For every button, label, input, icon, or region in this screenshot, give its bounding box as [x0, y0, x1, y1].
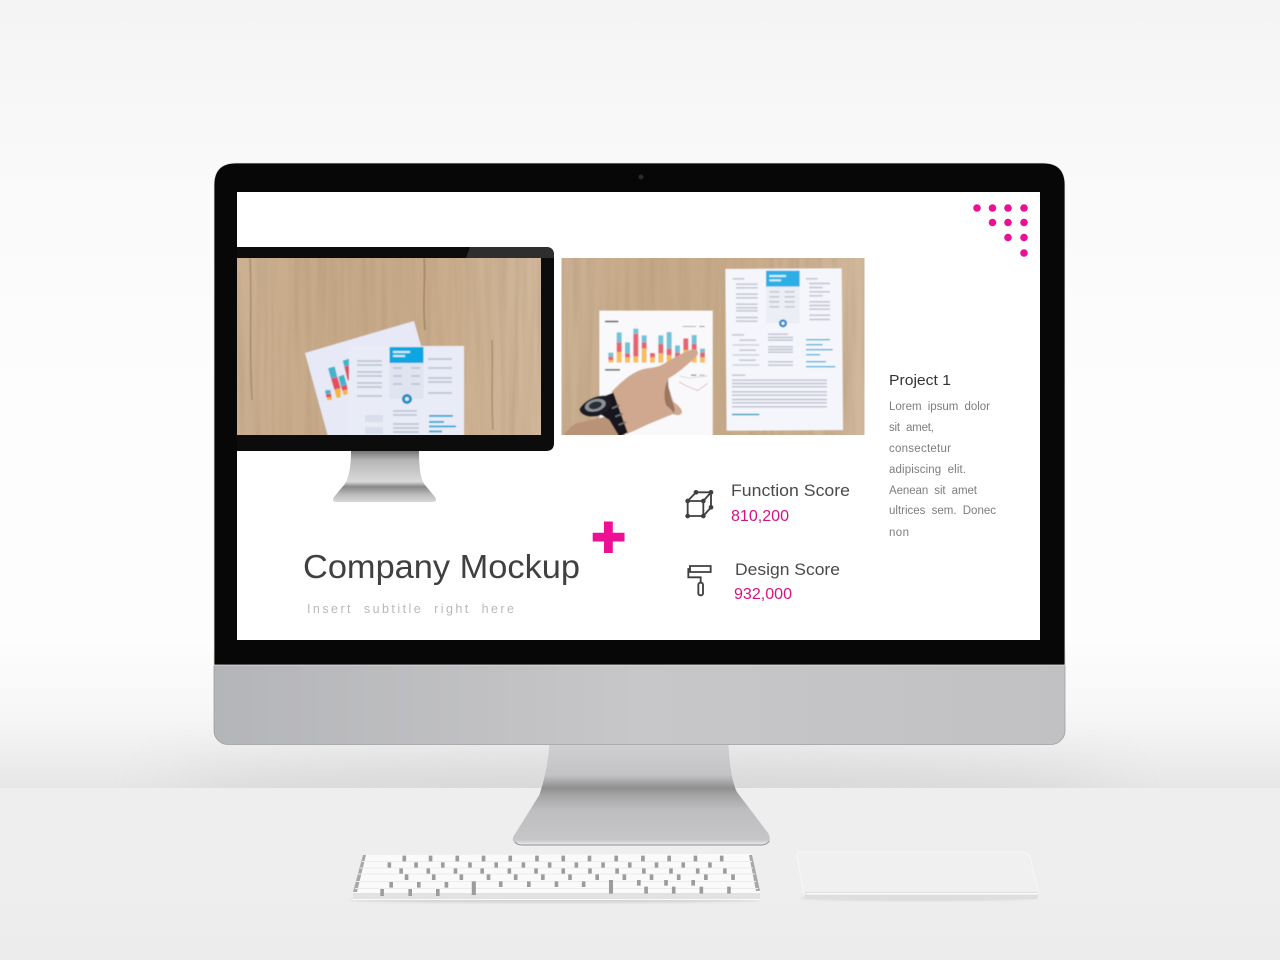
webcam [638, 174, 644, 180]
rotated chart paper [304, 320, 422, 435]
project description: ultrices sem. Donec [889, 505, 996, 517]
monitor stand [513, 745, 770, 845]
slide screen [237, 192, 1040, 640]
title: Company Mockup [303, 548, 580, 585]
trackpad [797, 852, 1038, 901]
keyboard body [353, 854, 760, 900]
project description: non [889, 527, 909, 539]
monitor body [214, 163, 1065, 744]
pink dot decoration [973, 204, 1028, 257]
project description: consectetur [889, 443, 951, 455]
small monitor picture: wood desk with reports [235, 256, 543, 440]
key row lines [355, 862, 758, 888]
project description: Aenean sit amet [889, 485, 978, 497]
line chart [679, 382, 708, 391]
subtitle: Insert subtitle right here [307, 602, 516, 616]
keyboard [350, 854, 760, 903]
icon: cube [685, 490, 713, 518]
project heading: Project 1 [889, 372, 951, 389]
wrist watch [579, 393, 628, 437]
resume blue header [390, 347, 424, 363]
function score label: Function Score [731, 481, 850, 500]
design score label: Design Score [735, 560, 840, 579]
resume text lines [732, 278, 830, 408]
resume circle badge [402, 394, 412, 404]
pink plus [593, 522, 624, 553]
rotated paper bars [325, 359, 349, 400]
resume blue skill bars [806, 339, 835, 367]
photo: hand pointing at charts [559, 256, 867, 439]
project description: adipiscing elit. [889, 464, 966, 476]
small monitor bezel [237, 247, 554, 451]
small monitor mockup [235, 247, 554, 502]
resume paper [725, 268, 843, 431]
desk surface [0, 788, 1280, 960]
key gaps [380, 856, 735, 896]
chart paper [599, 311, 713, 439]
resume blue skill bars [429, 415, 456, 432]
monitor chin [214, 640, 1065, 744]
function score value: 810,200 [731, 508, 789, 525]
pointing hand [561, 349, 698, 438]
signature [732, 414, 759, 415]
front resume paper [349, 346, 464, 438]
stacked bar chart on paper [608, 329, 705, 363]
chart paper labels [605, 321, 705, 376]
icon: paint roller [688, 566, 711, 595]
project description: sit amet, [889, 422, 934, 434]
project description [889, 401, 996, 539]
project description: Lorem ipsum dolor [889, 401, 990, 413]
resume blue header [766, 271, 800, 287]
small monitor stand [333, 451, 436, 502]
resume text lines [357, 358, 452, 433]
resume circle badge [779, 319, 787, 327]
design score value: 932,000 [734, 586, 792, 603]
monitor black bezel [214, 163, 1065, 665]
